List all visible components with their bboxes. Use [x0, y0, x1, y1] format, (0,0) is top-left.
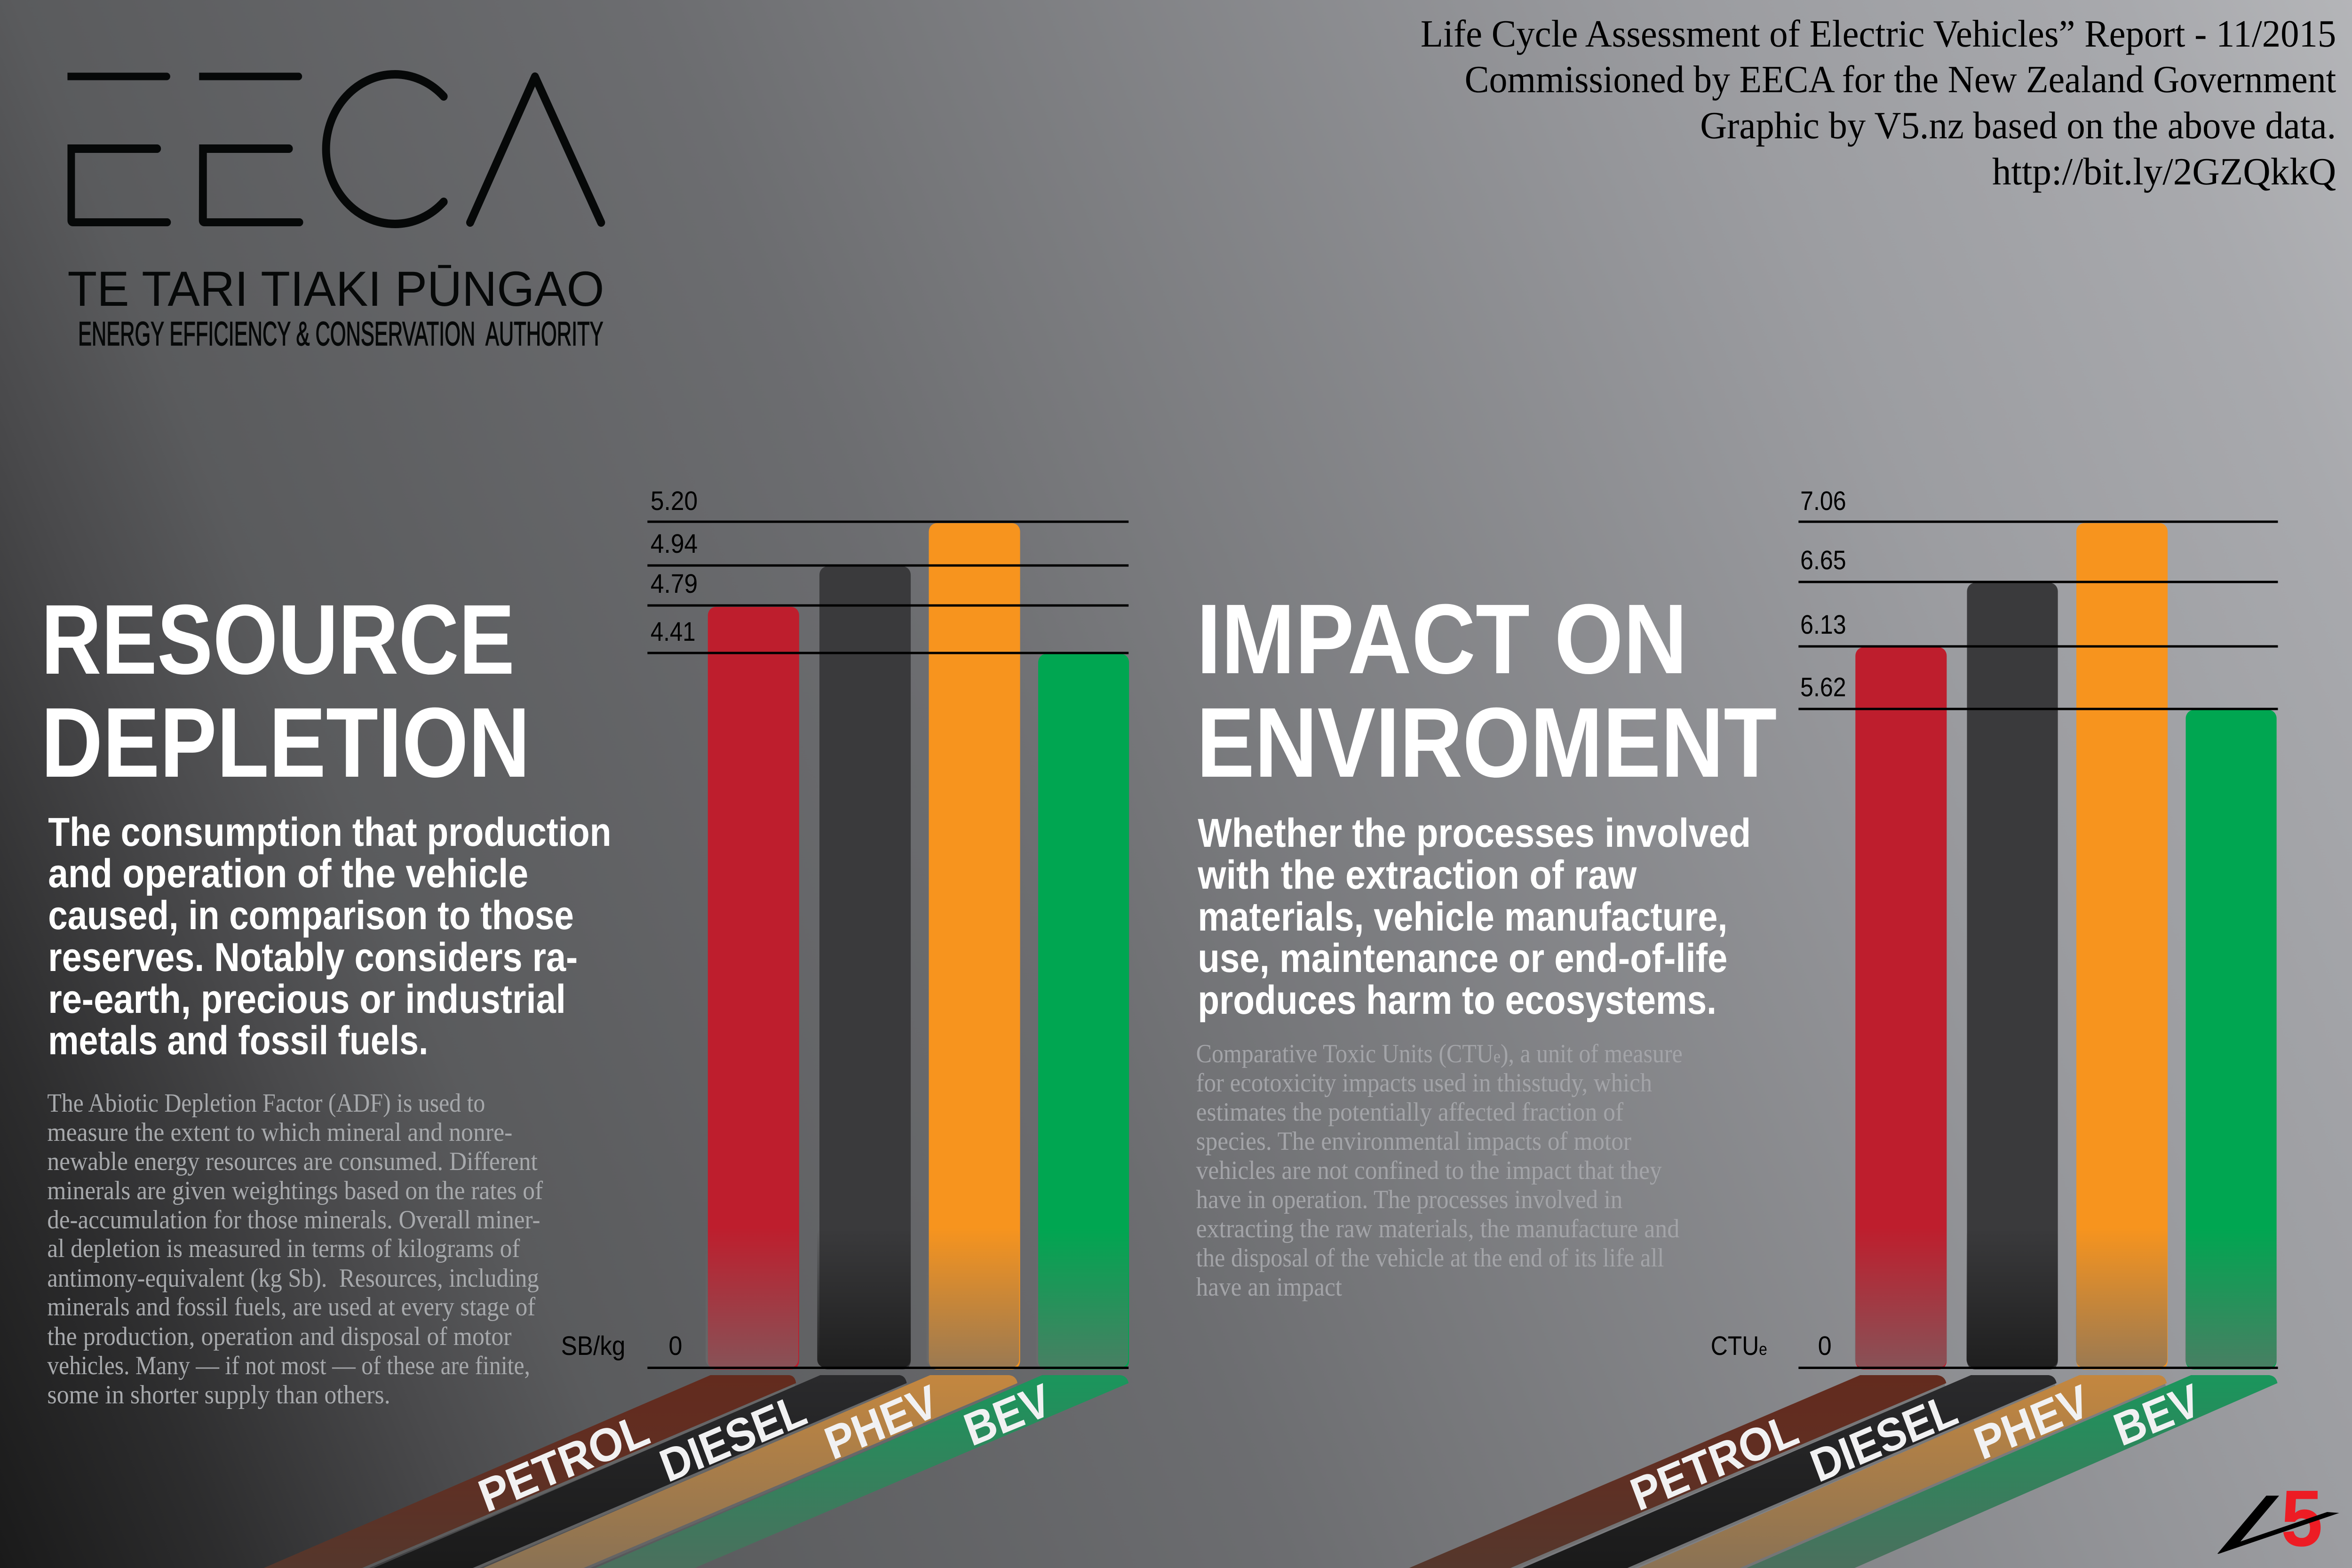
- body text: comparative toxic units: have in operation. The processes involved in: [1196, 1185, 1622, 1214]
- subheading: impact on enviroment: with the extraction of raw: [1198, 852, 1637, 898]
- strip shadows: [1408, 1378, 2166, 1568]
- axis unit: CTUe: [1711, 1331, 1767, 1361]
- label: BEV: BEV: [2107, 1374, 2207, 1456]
- subheading: resource depletion: caused, in comparison to those: [48, 893, 574, 938]
- logo te reo name: TE TARI TIAKI PŪNGAO: [67, 262, 604, 317]
- body text: comparative toxic units: vehicles are not confined to the impact that they: [1196, 1156, 1662, 1185]
- vehicle strips: right chart: [1408, 1374, 2278, 1568]
- body text: abiotic depletion factor: The Abiotic Depletion Factor (ADF) is used to: [47, 1089, 485, 1118]
- label: petrol: PETROL: [472, 1403, 656, 1522]
- value lines: [1798, 520, 2278, 1369]
- body text: abiotic depletion factor: al depletion is measured in terms of kilograms of: [47, 1234, 520, 1263]
- body text: comparative toxic units: estimates the potentially affected fraction of: [1196, 1098, 1623, 1127]
- heading: impact on enviroment: ENVIROMENT: [1197, 687, 1777, 798]
- label: petrol: PETROL: [1624, 1403, 1805, 1520]
- strip: diesel: [373, 1375, 907, 1568]
- value lines: [647, 520, 1128, 1369]
- body text: abiotic depletion factor: minerals are given weightings based on the rates of: [47, 1176, 543, 1205]
- logo tick mark: [2217, 1496, 2339, 1554]
- bar reflections: [1855, 1228, 2277, 1367]
- bar reflections: [706, 1228, 1128, 1367]
- subheading: impact on enviroment: Whether the processes involved: [1198, 811, 1751, 856]
- heading: impact on enviroment: [1197, 583, 1777, 798]
- body text: abiotic depletion factor: vehicles. Many — if not most — of these are finite,: [47, 1351, 530, 1380]
- body text: abiotic depletion factor: [47, 1089, 543, 1409]
- heading: resource depletion: RESOURCE: [41, 584, 515, 695]
- subheading: resource depletion: and operation of the vehicle: [48, 851, 528, 896]
- bar: petrol 6.13: [1855, 647, 1947, 1369]
- logo digit: 5: [2281, 1474, 2323, 1563]
- value labels: 6.65: [1800, 545, 1846, 575]
- source credits: http://bit.ly/2GZQkkQ: [1992, 150, 2336, 193]
- body text: abiotic depletion factor: the production, operation and disposal of motor: [47, 1322, 512, 1351]
- logo mark letters: [67, 72, 601, 226]
- axis unit: SB/kg: [561, 1331, 625, 1361]
- bar chart: impact on enviroment: [1711, 486, 2278, 1369]
- body text: comparative toxic units: extracting the raw materials, the manufacture and: [1196, 1214, 1679, 1243]
- body text: comparative toxic units: species. The environmental impacts of motor: [1196, 1127, 1631, 1156]
- strip: petrol: [264, 1375, 796, 1568]
- source credits: [1421, 12, 2336, 193]
- subheading: impact on enviroment: produces harm to ecosystems.: [1198, 978, 1716, 1023]
- value labels: 4.79: [651, 569, 698, 599]
- source credits: Graphic by V5.nz based on the above data.: [1700, 104, 2336, 147]
- value labels: 0: [1818, 1331, 1832, 1361]
- body text: comparative toxic units: the disposal of the vehicle at the end of its life all: [1196, 1243, 1664, 1273]
- bar: PHEV 5.20: [929, 523, 1020, 1369]
- value labels: 5.20: [651, 486, 698, 516]
- subheading: resource depletion: re-earth, precious or industrial: [48, 977, 566, 1022]
- value labels: [1800, 486, 1846, 1361]
- value labels: 4.94: [651, 529, 698, 559]
- body text: comparative toxic units: for ecotoxicity impacts used in thisstudy, which: [1196, 1068, 1652, 1098]
- strip: BEV: [596, 1375, 1128, 1568]
- subheading: resource depletion: [48, 810, 611, 1063]
- value labels: [651, 486, 698, 1361]
- subheading: impact on enviroment: materials, vehicle manufacture,: [1198, 894, 1727, 939]
- body text: abiotic depletion factor: minerals and fossil fuels, are used at every stage of: [47, 1292, 536, 1321]
- heading: impact on enviroment: IMPACT ON: [1197, 583, 1687, 694]
- subheading: resource depletion: metals and fossil fuels.: [48, 1018, 428, 1063]
- strip: BEV: [1747, 1375, 2278, 1568]
- label: diesel: DIESEL: [1804, 1383, 1964, 1492]
- body text: abiotic depletion factor: some in shorter supply than others.: [47, 1380, 390, 1409]
- bar: diesel 6.65: [1967, 583, 2058, 1369]
- body text: abiotic depletion factor: newable energy resources are consumed. Different: [47, 1147, 538, 1176]
- subheading: impact on enviroment: use, maintenance or end-of-life: [1198, 936, 1727, 981]
- strip: diesel: [1522, 1375, 2057, 1568]
- vehicle strips: left chart: [263, 1373, 1128, 1568]
- label: diesel: DIESEL: [653, 1383, 813, 1492]
- value labels: 4.41: [651, 617, 696, 647]
- value labels: 6.13: [1800, 610, 1846, 640]
- label: PHEV: PHEV: [1967, 1375, 2096, 1470]
- logo: V5: [2217, 1474, 2339, 1563]
- bar: petrol 4.79: [708, 607, 799, 1369]
- value labels: 5.62: [1800, 672, 1846, 702]
- subheading: resource depletion: The consumption that production: [48, 810, 611, 855]
- subheading: impact on enviroment: [1198, 811, 1751, 1023]
- source credits: Life Cycle Assessment of Electric Vehicles” Report - 11/2015: [1421, 12, 2336, 55]
- logo: EECA: [67, 72, 604, 353]
- strip: petrol: [1409, 1375, 1946, 1568]
- heading: resource depletion: [41, 584, 530, 798]
- body text: abiotic depletion factor: de-accumulation for those minerals. Overall miner-: [47, 1205, 540, 1234]
- source credits: Commissioned by EECA for the New Zealand Government: [1465, 58, 2336, 101]
- label: BEV: BEV: [957, 1373, 1057, 1456]
- heading: resource depletion: DEPLETION: [41, 687, 530, 798]
- bar: diesel 4.94: [819, 566, 911, 1369]
- label: PHEV: PHEV: [818, 1375, 945, 1469]
- bar chart: resource depletion: [561, 486, 1129, 1369]
- body text: comparative toxic units: [1196, 1039, 1683, 1302]
- body text: comparative toxic units: have an impact: [1196, 1273, 1342, 1302]
- value labels: 7.06: [1800, 486, 1846, 516]
- subheading: resource depletion: reserves. Notably considers ra-: [48, 935, 578, 980]
- bar: PHEV 7.06: [2076, 523, 2168, 1369]
- strip shadows: [263, 1378, 1017, 1568]
- logo english name: ENERGY EFFICIENCY & CONSERVATION AUTHORITY: [78, 315, 604, 353]
- body text: abiotic depletion factor: measure the extent to which mineral and nonre-: [47, 1118, 512, 1147]
- value labels: 0: [668, 1331, 682, 1361]
- bar: BEV 4.41: [1038, 654, 1129, 1369]
- body text: abiotic depletion factor: antimony-equivalent (kg Sb). Resources, including: [47, 1264, 539, 1293]
- body text: comparative toxic units: Comparative Toxic Units (CTUe), a unit of measure: [1196, 1039, 1683, 1068]
- bar: BEV 5.62: [2186, 710, 2277, 1369]
- strip: PHEV: [484, 1375, 1017, 1568]
- strip: PHEV: [1638, 1375, 2167, 1568]
